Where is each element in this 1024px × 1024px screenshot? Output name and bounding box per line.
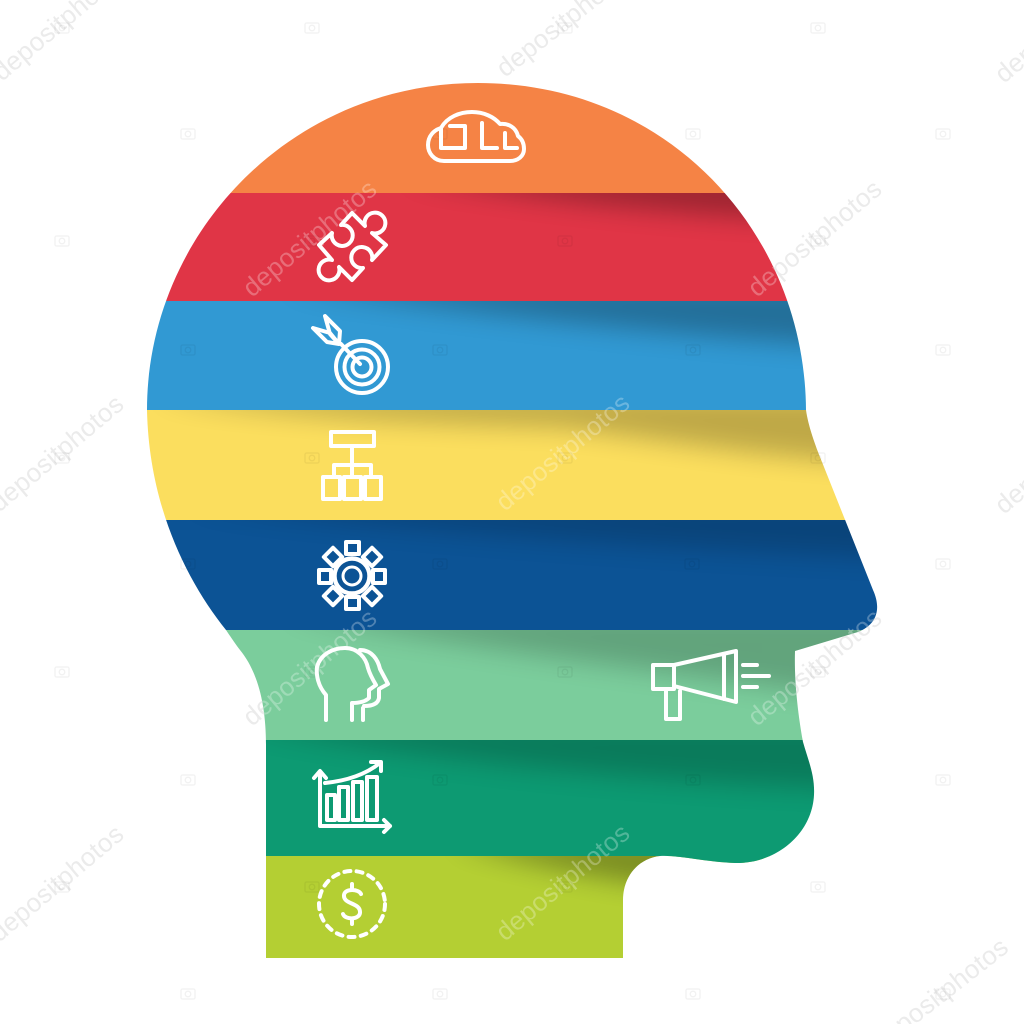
watermark: marks over the head: depositphotos xyxy=(742,603,887,732)
band: green xyxy=(266,740,814,863)
watermark: marks over the head: depositphotos xyxy=(237,174,382,303)
watermark: marks over the head xyxy=(237,174,887,947)
watermark: background depositphotos marks: depositphotos xyxy=(237,603,382,732)
head silhouette with colored bands xyxy=(140,80,900,958)
band: light green xyxy=(226,630,862,740)
band: red xyxy=(166,193,788,301)
icon: megaphone xyxy=(653,651,769,719)
watermark: marks over the head: depositphotos xyxy=(237,603,382,732)
icon: puzzle piece xyxy=(319,213,386,280)
watermark: background depositphotos marks: depositphotos xyxy=(742,174,887,303)
watermark: marks over the head: depositphotos xyxy=(490,818,635,947)
icon: bar chart with arrows xyxy=(314,762,390,832)
icon: two heads xyxy=(317,648,388,720)
watermark: background depositphotos marks: depositphotos xyxy=(237,174,382,303)
band: lime xyxy=(266,856,770,958)
watermark: marks over the head: depositphotos xyxy=(490,388,635,517)
band: orange xyxy=(230,83,724,193)
icon: gear xyxy=(319,542,385,609)
watermark: background depositphotos marks: depositphotos xyxy=(742,603,887,732)
icon: cloud xyxy=(428,112,524,161)
watermark: background depositphotos marks: depositphotos xyxy=(490,388,635,517)
watermark: marks over the head: depositphotos xyxy=(742,174,887,303)
band: navy xyxy=(166,520,878,630)
icon: hierarchy chart xyxy=(323,432,381,499)
watermark: background depositphotos marks: depositphotos xyxy=(490,818,635,947)
band: blue xyxy=(147,301,806,410)
icon: dollar coin xyxy=(319,871,385,937)
icon: target with arrow xyxy=(313,316,388,393)
band: yellow xyxy=(147,410,846,520)
